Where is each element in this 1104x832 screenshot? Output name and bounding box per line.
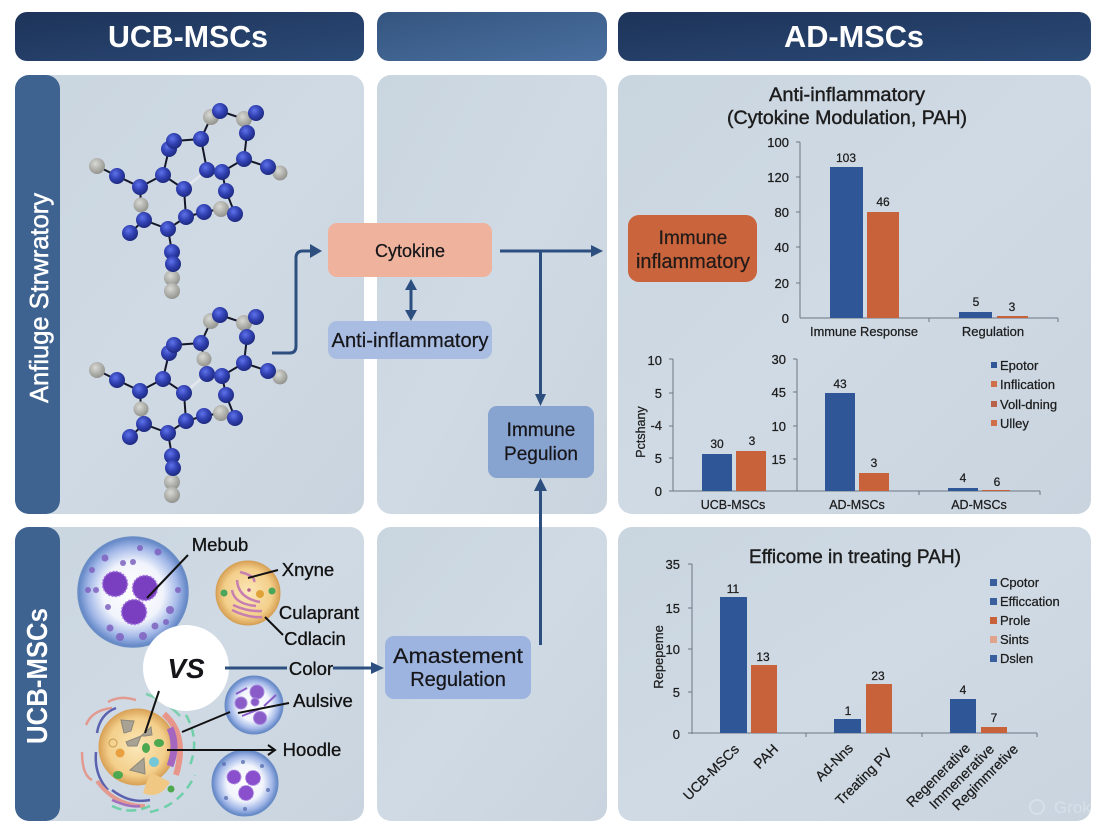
bar chart: efficacy: 35: [666, 557, 680, 572]
bar chart: comparison: 15: [772, 452, 786, 467]
box: Immune Pegulion: Pegulion: [504, 444, 578, 465]
bar chart: efficacy: 5: [673, 685, 680, 700]
bar chart: comparison: AD-MSCs: [829, 498, 885, 512]
bar chart: comparison: AD-MSCs: [951, 498, 1007, 512]
box: Amastement Regulation: [385, 636, 531, 699]
arrow: color to regulation: [225, 662, 384, 674]
bar chart: efficacy: Regenerative: [903, 740, 973, 810]
leader lines: [145, 555, 289, 755]
bar chart: immune response: [767, 135, 1058, 339]
bar chart: efficacy: 23: [871, 669, 885, 683]
bar chart: comparison: 6: [994, 475, 1001, 489]
arrow: molecule to cytokine: [272, 244, 322, 353]
bar chart: efficacy: Ad-Nns: [812, 740, 856, 784]
header: UCB-MSCs: UCB-MSCs: [108, 19, 268, 54]
molecule bottom: [89, 307, 288, 503]
legend: efficacy: [990, 575, 1060, 666]
bar chart: efficacy: [651, 557, 1037, 813]
bar chart: efficacy: Immenerative: [926, 741, 997, 812]
title: Anti-inflammatory: (Cytokine Modulation, PAH): [727, 108, 967, 129]
bar chart: comparison: UCB-MSCs: [701, 498, 765, 512]
label: Color: Color: [289, 658, 333, 679]
box: Cytokine: [328, 223, 492, 277]
legend: efficacy: Efficcation: [1000, 594, 1060, 609]
bar chart: immune response: 40: [775, 240, 789, 255]
bar chart: immune response: 80: [775, 205, 789, 220]
title: Anti-inflammatory: [727, 85, 967, 129]
bar chart: immune response: 5: [973, 295, 980, 309]
legend: comparison: Inflication: [1000, 377, 1055, 392]
box: Anti-inflammatory: [328, 321, 492, 359]
panel: efficacy chart: [618, 527, 1091, 821]
bar chart: efficacy: 1: [845, 704, 852, 718]
bar chart: efficacy: 0: [673, 727, 680, 742]
panel: cell comparison: [15, 527, 364, 821]
VS badge: [143, 625, 229, 711]
legend: comparison: Ulley: [1000, 416, 1029, 431]
panel: pathway top: [377, 75, 607, 514]
label: Hoodle: Hoodle: [283, 739, 341, 760]
sidebar: UCB-MSCs: UCB-MSCs: [22, 608, 54, 744]
cell: small cell 4: [212, 750, 278, 816]
label: Cdlacin: Cdlacin: [284, 628, 346, 649]
bar chart: comparison: 30: [710, 437, 724, 451]
VS badge: VS: [167, 653, 205, 684]
box: Immune inflammatory: inflammatory: [636, 251, 750, 273]
cell: small cell 3: [225, 676, 283, 734]
label: Mebub: Mebub: [192, 534, 248, 555]
bar chart: efficacy: 15: [666, 601, 680, 616]
bar chart: comparison: 0: [655, 484, 662, 499]
box: Anti-inflammatory: Anti-inflammatory: [332, 330, 488, 352]
label: Xnyne: Xnyne: [282, 559, 334, 580]
bar chart: comparison: 5: [655, 451, 662, 466]
legend: efficacy: Sints: [1000, 632, 1029, 647]
bar chart: efficacy: 7: [991, 711, 998, 725]
bar chart: comparison: 3: [871, 456, 878, 470]
arrow: cytokine to chart: [500, 245, 603, 257]
box: Immune inflammatory: Immune: [659, 228, 727, 249]
bar chart: immune response: 46: [876, 195, 890, 209]
legend: comparison: [991, 358, 1057, 431]
bar chart: comparison: 43: [833, 377, 847, 391]
bar chart: immune response: Regulation: [962, 324, 1024, 339]
bar chart: efficacy: Regimmretive: [949, 741, 1021, 813]
legend: efficacy: Cpotor: [1000, 575, 1040, 590]
bar chart: comparison: -4: [650, 418, 662, 433]
box: Cytokine: Cytokine: [375, 241, 445, 261]
arrow: regulation up: [534, 478, 547, 645]
header: AD-MSCs: AD-MSCs: [784, 19, 924, 54]
legend: comparison: Epotor: [1000, 358, 1039, 373]
bar chart: comparison: 3: [749, 434, 756, 448]
box: Immune inflammatory: [628, 215, 757, 282]
title: Anti-inflammatory: Anti-inflammatory: [769, 85, 926, 106]
bar chart: immune response: 0: [782, 311, 789, 326]
panel: pathway bottom: [377, 527, 607, 821]
bar chart: immune response: Immune Response: [810, 324, 918, 339]
bar chart: efficacy: Treating PV: [832, 744, 896, 808]
header: UCB-MSCs: [15, 12, 364, 61]
bar chart: comparison: 45: [772, 385, 786, 400]
bar chart: efficacy: UCB-MSCs: [680, 741, 742, 803]
arrow: branch to immune regulation: [535, 251, 546, 406]
bar chart: comparison: [634, 352, 1040, 512]
box: Immune Pegulion: Immune: [507, 420, 575, 441]
watermark: Grok: [1030, 798, 1091, 817]
sidebar: UCB-MSCs: [15, 527, 60, 821]
bar chart: efficacy: 13: [756, 650, 770, 664]
bar chart: comparison: 10: [648, 353, 662, 368]
bar chart: comparison: Pctshany: [634, 406, 648, 458]
bar chart: immune response: 20: [775, 276, 789, 291]
watermark: Grok: Grok: [1054, 798, 1091, 817]
bar chart: efficacy: 11: [727, 582, 740, 596]
legend: efficacy: Prole: [1000, 613, 1030, 628]
bar chart: immune response: 120: [767, 170, 789, 185]
header: middle blank: [377, 12, 607, 61]
cell: large immune cell: [78, 537, 188, 647]
legend: efficacy: Dslen: [1000, 651, 1033, 666]
sidebar: Anfiuge Strwratory: [15, 75, 60, 514]
cell: large organelle cell: [82, 694, 195, 812]
bar chart: comparison: 5: [655, 386, 662, 401]
panel: anti-inflammatory charts: [618, 75, 1091, 514]
bar chart: efficacy: PAH: [750, 741, 781, 772]
bar chart: efficacy: Repepeme: [651, 625, 666, 689]
label: Culaprant: Culaprant: [279, 602, 359, 623]
cell: organelle cell: [216, 561, 280, 625]
molecule top: [89, 103, 288, 299]
header: AD-MSCs: [618, 12, 1091, 61]
box: Amastement Regulation: Amastement: [393, 645, 523, 668]
title: Efficome: Efficome in treating PAH): [749, 547, 961, 568]
label: Aulsive: Aulsive: [293, 690, 353, 711]
bar chart: immune response: 3: [1009, 300, 1016, 314]
bar chart: comparison: 10: [772, 419, 786, 434]
box: Amastement Regulation: Regulation: [410, 669, 506, 691]
panel: molecular structures: [15, 75, 364, 514]
sidebar: Anfiuge Strwratory: Anfiuge Strwratory: [24, 193, 54, 403]
bar chart: immune response: 103: [836, 151, 856, 165]
box: Immune Pegulion: [488, 406, 594, 478]
bar chart: efficacy: 4: [960, 683, 967, 697]
bar chart: comparison: 4: [960, 471, 967, 485]
bar chart: comparison: 30: [772, 352, 786, 367]
legend: comparison: Voll-dning: [1000, 397, 1057, 412]
bar chart: efficacy: 10: [666, 642, 680, 657]
bar chart: immune response: 100: [767, 135, 789, 150]
arrow: cytokine anti-inflammatory double: [405, 279, 417, 321]
